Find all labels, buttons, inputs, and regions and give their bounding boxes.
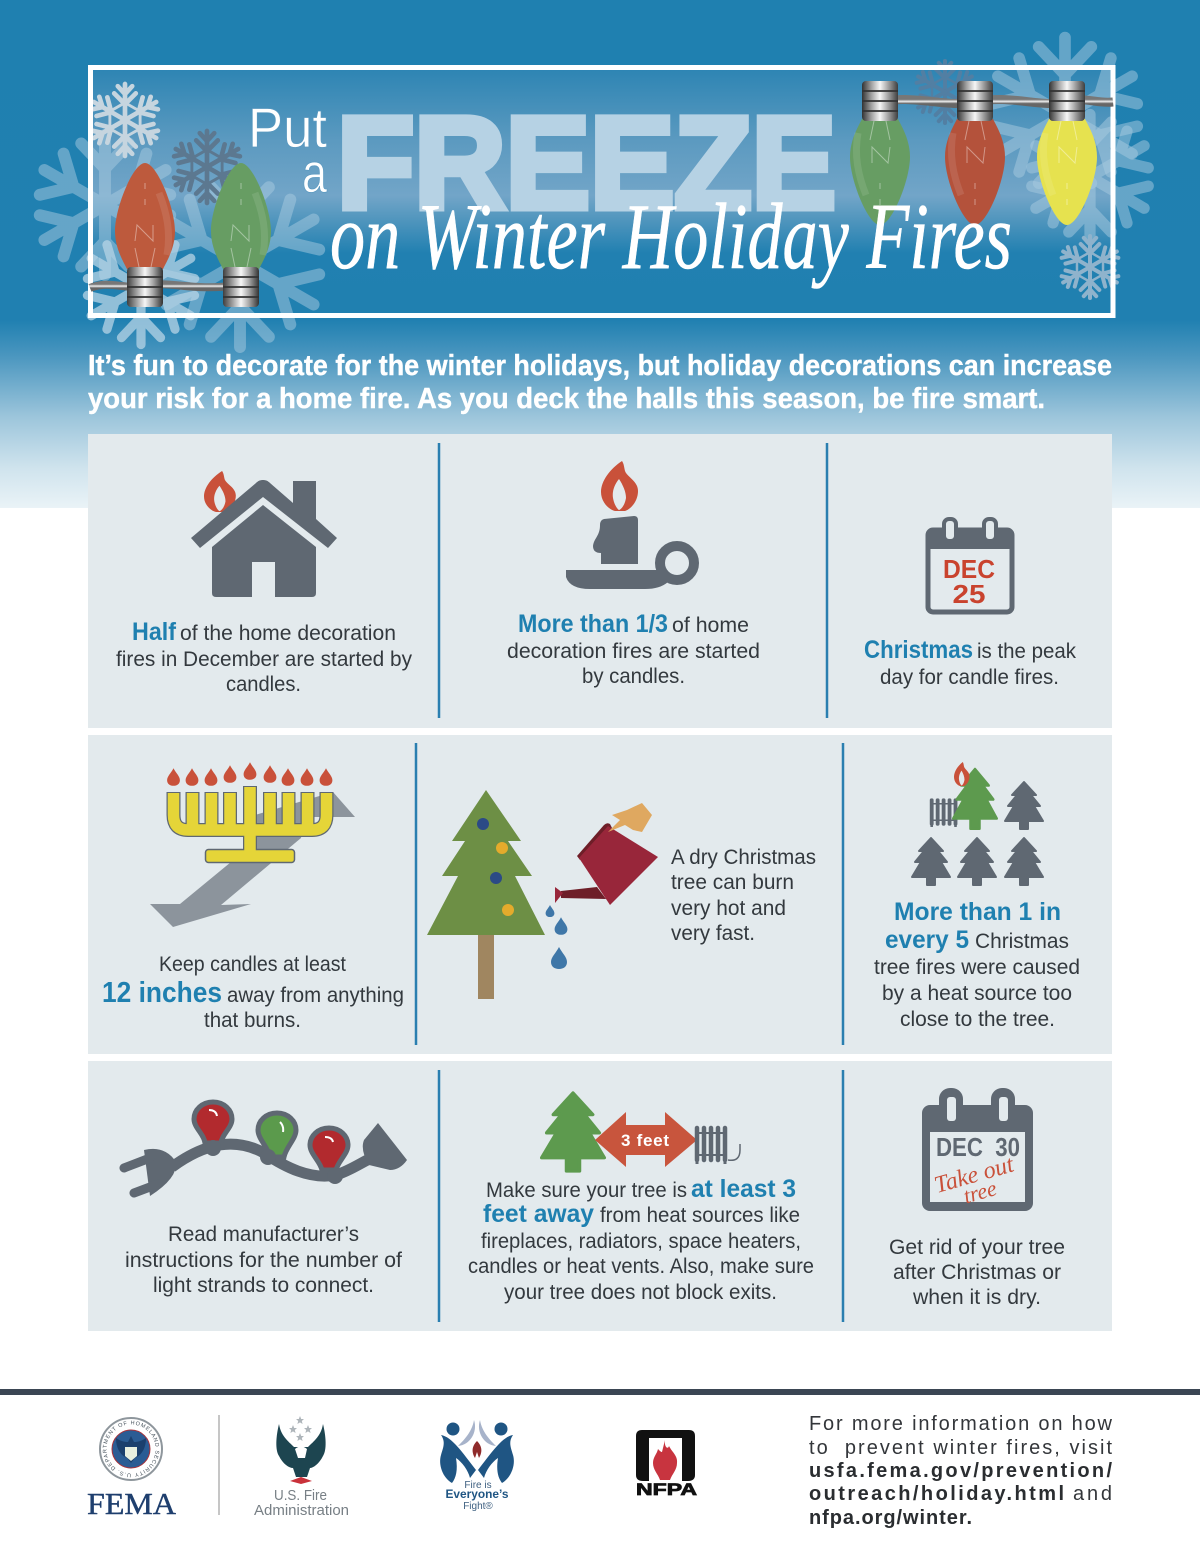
text: 3 feet away: your tree does not block exits.: [504, 1280, 777, 1304]
title: FREEZE: FREEZE: [337, 89, 836, 236]
text: get rid of tree: Get rid of your tree: [889, 1235, 1065, 1259]
logo: U.S. Fire Administration: U.S. Fire: [274, 1487, 327, 1504]
logo: Fire is Everyone's Fight: Fire is: [464, 1480, 492, 1491]
text: 1 in 5: tree fires were caused: [874, 955, 1080, 979]
text: dry tree: A dry Christmas: [671, 845, 816, 869]
snowflakes left: [32, 84, 328, 347]
icon: candle: [566, 461, 694, 589]
lights right: [850, 81, 1113, 225]
logo: U.S. Fire Administration: Administration: [254, 1502, 349, 1519]
icon: christmas tree: [427, 790, 545, 999]
text: half of fires: [116, 618, 412, 696]
text: more information: nfpa.org/winter.: [809, 1507, 972, 1529]
icon: tree, 3 feet arrow, radiator: 3 feet: [621, 1131, 669, 1150]
text: more information: to prevent winter fires, visit: [809, 1437, 1112, 1459]
text: 1 in 5: every 5: [885, 926, 969, 954]
text: 12 inches: Keep candles at least: [159, 952, 346, 976]
icon: calendar Dec 25: 25: [952, 579, 986, 609]
text: read instructions: [125, 1222, 402, 1297]
text: more information: usfa.fema.gov/prevention/: [809, 1460, 1112, 1482]
logo: Fire is Everyone's Fight: Everyone’s: [446, 1489, 508, 1501]
title: Put a: a: [302, 141, 328, 204]
snowflakes right: [914, 38, 1155, 298]
icon: calendar Dec 25: [928, 519, 1012, 612]
text: christmas peak: day for candle fires.: [880, 665, 1059, 689]
text: half of fires: candles.: [226, 672, 301, 696]
icon: house on fire: [191, 471, 337, 597]
text: 12 inches: 12 inches: [102, 977, 222, 1009]
text: half of fires: Half: [132, 618, 177, 646]
text: get rid of tree: after Christmas or: [893, 1260, 1061, 1284]
text: 12 inches: away from anything: [227, 983, 404, 1007]
logo: FEMA: FEMA: [87, 1486, 177, 1521]
logo: NFPA: [636, 1430, 697, 1499]
text: 3 feet away: [468, 1175, 814, 1304]
text: half of fires: of the home decoration: [180, 621, 396, 645]
text: more than 1/3: More than 1/3: [518, 610, 668, 638]
text: 1 in 5: More than 1 in: [894, 898, 1061, 926]
text: more information: [809, 1413, 1113, 1529]
footer rule: [0, 1389, 1200, 1395]
text: 12 inches: [102, 952, 404, 1032]
text: more information: For more information on how: [809, 1413, 1113, 1435]
logo: FEMA: [87, 1417, 177, 1521]
icon: calendar Dec 30: tree: [960, 1175, 1000, 1208]
panel: row 3: [88, 1061, 1112, 1331]
logo: U.S. Fire Administration: [254, 1416, 349, 1519]
text: 1 in 5: close to the tree.: [900, 1007, 1055, 1031]
icon: tree group with radiator: [912, 762, 1043, 885]
text: dry tree: very fast.: [671, 921, 755, 945]
text: 3 feet away: feet away: [483, 1200, 594, 1228]
text: more information: outreach/holiday.html: [809, 1483, 1064, 1505]
lights left: [90, 163, 271, 307]
text: christmas peak: is the peak: [977, 639, 1076, 663]
text: 3 feet away: at least 3: [691, 1175, 796, 1203]
text: christmas peak: [864, 636, 1076, 689]
intro text: It’s fun to decorate for the winter holidays, but holiday decorations can increase: [88, 350, 1112, 382]
intro text: your risk for a home fire. As you deck the halls this season, be fire smart.: [88, 383, 1045, 415]
logo: NFPA: NFPA: [636, 1480, 697, 1499]
title: Put a: Put: [248, 96, 327, 159]
text: more than 1/3: of home: [672, 613, 749, 637]
text: 1 in 5: Christmas: [975, 929, 1069, 953]
panel: row 2: [88, 735, 1112, 1054]
banner frame: [90, 68, 1113, 316]
logo: Fire is Everyone's Fight: [440, 1420, 514, 1512]
text: read instructions: Read manufacturer’s: [168, 1222, 359, 1246]
text: 1 in 5: by a heat source too: [882, 981, 1072, 1005]
icon: menorah with shadow: [150, 762, 355, 927]
text: 1 in 5: [874, 898, 1080, 1031]
text: dry tree: [671, 845, 816, 945]
icon: calendar Dec 30: [922, 1088, 1033, 1211]
text: get rid of tree: when it is dry.: [912, 1285, 1041, 1309]
text: more than 1/3: decoration fires are started: [507, 639, 760, 663]
icon: calendar Dec 30: Take out: [931, 1151, 1018, 1199]
icon: calendar Dec 30: DEC 30: [936, 1132, 1020, 1162]
icon: watering can: [546, 803, 658, 969]
panel: row 1: [88, 434, 1112, 728]
icon: light strand: [124, 1102, 407, 1196]
text: 3 feet away: from heat sources like: [600, 1203, 800, 1227]
title: Put a: [248, 96, 328, 204]
icon: calendar Dec 25: DEC: [943, 554, 995, 584]
icon: tree, 3 feet arrow, radiator: [542, 1093, 740, 1171]
text: christmas peak: Christmas: [864, 636, 973, 664]
text: 12 inches: that burns.: [204, 1008, 301, 1032]
text: 3 feet away: candles or heat vents. Also, make sure: [468, 1254, 814, 1278]
logo: Fire is Everyone's Fight: Fight®: [463, 1501, 493, 1512]
text: read instructions: light strands to connect.: [153, 1273, 374, 1297]
text: more than 1/3: by candles.: [582, 664, 685, 688]
text: read instructions: instructions for the number of: [125, 1248, 402, 1272]
text: half of fires: fires in December are started by: [116, 647, 412, 671]
text: dry tree: tree can burn: [671, 870, 794, 894]
text: 3 feet away: fireplaces, radiators, space heaters,: [481, 1229, 801, 1253]
intro text: [88, 350, 1112, 415]
text: dry tree: very hot and: [671, 896, 786, 920]
banner: [32, 38, 1155, 347]
text: more information: and: [1073, 1483, 1112, 1505]
logo: FEMA: U.S. DEPARTMENT OF HOMELAND SECURITY: [102, 1420, 160, 1478]
text: more than 1/3: [507, 610, 760, 688]
text: 3 feet away: Make sure your tree is: [486, 1178, 687, 1202]
page background gradient: [0, 0, 1200, 508]
text: get rid of tree: [889, 1235, 1065, 1309]
